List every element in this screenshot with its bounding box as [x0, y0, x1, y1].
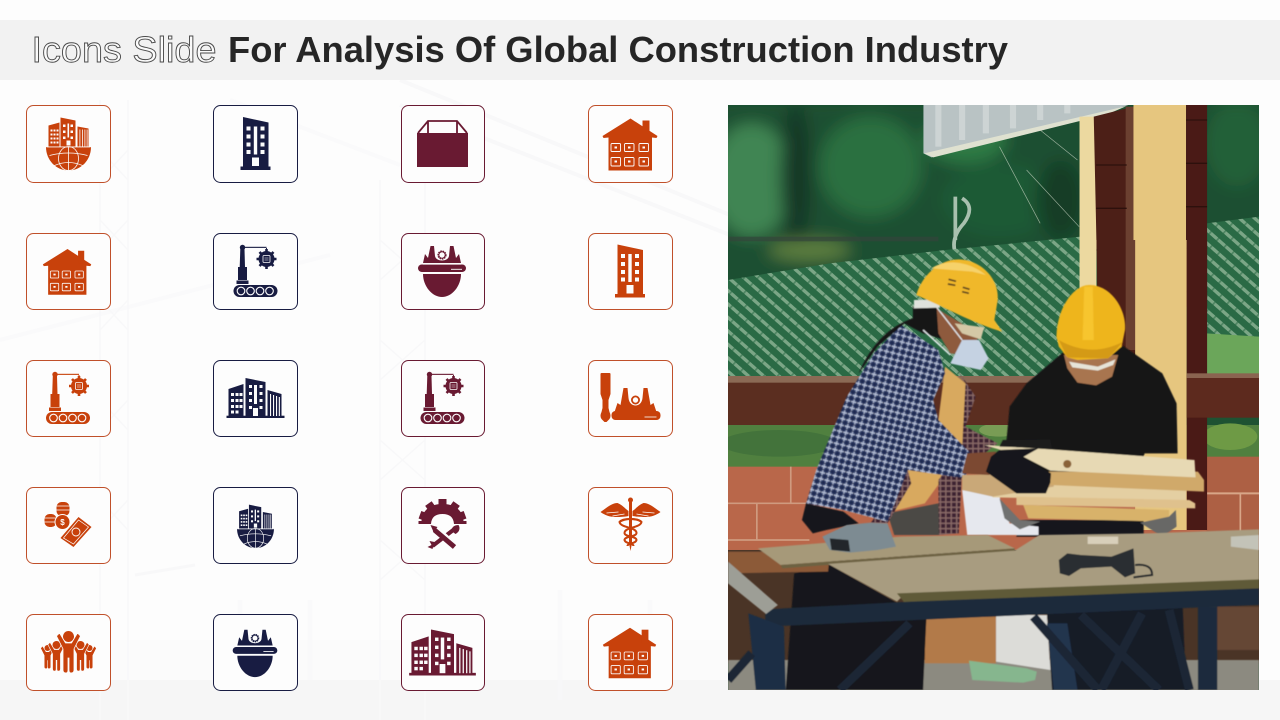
icon: screwdriver and helmet, orange	[588, 360, 672, 436]
icon: apartment house, orange	[588, 614, 672, 690]
icon: worker helmet, navy	[214, 614, 298, 690]
photo: worker in plaid shirt and worker in black tee	[802, 259, 1204, 537]
timber stack	[989, 482, 1186, 502]
white sack	[962, 490, 1038, 535]
icon: worker helmet, maroon	[402, 234, 484, 310]
icon: factory robot arm, navy	[214, 234, 298, 310]
black tee worker	[1006, 346, 1178, 480]
plaid shirt	[806, 325, 971, 522]
icon: open box, maroon	[402, 106, 484, 182]
icon: group of people, orange	[26, 614, 110, 690]
icon: factory robot arm, maroon	[402, 360, 484, 436]
title: For Analysis Of Global Construction Industry	[228, 29, 1008, 70]
metal frame	[765, 588, 1259, 627]
icon: apartment house, orange	[588, 106, 672, 182]
photo mid-ground: rail, bushes and bricks	[721, 240, 1259, 663]
icon: office tower, orange	[588, 234, 672, 310]
tan tee and dark plaid overshirt	[891, 367, 966, 512]
upper side board and planks	[728, 552, 830, 573]
photo: two construction workers with timber	[728, 105, 1259, 690]
title bar	[0, 20, 1280, 80]
icon: coins and banknote, orange	[26, 488, 110, 564]
icon: gear with pencil and wrench, maroon	[402, 488, 484, 564]
icon: apartment house, orange	[26, 234, 110, 310]
table top	[828, 529, 1259, 602]
icon: city buildings, maroon	[402, 614, 484, 690]
legs	[786, 565, 926, 690]
title: Icons Slide	[32, 29, 216, 70]
icon: coins and banknote, orange: $	[60, 518, 65, 527]
photo background: trees and fence	[694, 100, 1280, 383]
jigsaw	[822, 523, 896, 553]
icon: caduceus, orange	[588, 488, 672, 564]
ground and items under bench	[728, 660, 1259, 692]
photo: workbench and tools	[728, 523, 1259, 692]
grey gloves below timber	[999, 498, 1040, 529]
icon: global city, orange	[26, 106, 110, 182]
icon: factory robot arm, orange	[26, 360, 110, 436]
icon: global city, navy	[214, 488, 298, 564]
ponytail and head	[859, 305, 945, 373]
icon: office tower, navy	[214, 106, 298, 182]
icon grid	[26, 106, 672, 690]
arm and gloves	[962, 452, 996, 475]
icon: city buildings, navy	[214, 360, 298, 436]
drill on table	[1059, 548, 1135, 577]
